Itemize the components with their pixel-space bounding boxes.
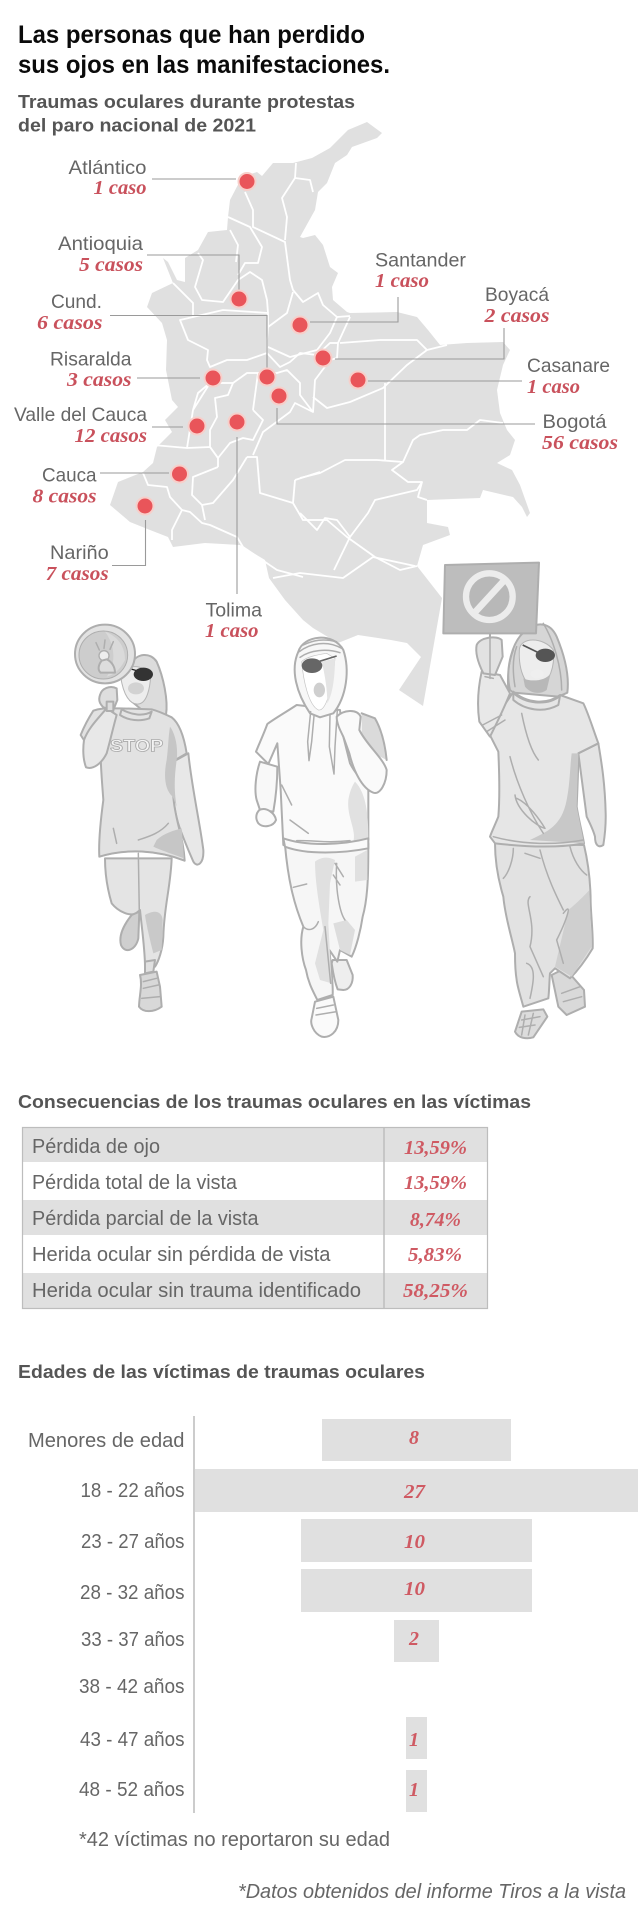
label: Antioquia xyxy=(58,233,143,276)
map of Colombia xyxy=(110,122,530,706)
figure: woman with megaphone: STOP xyxy=(110,736,163,756)
table: consequences: 5,83% xyxy=(408,1244,462,1266)
bar chart: ages: 8 xyxy=(409,1427,419,1449)
label: Cauca: Cauca xyxy=(42,464,97,486)
callout leader lines xyxy=(100,179,535,594)
table: consequences: 8,74% xyxy=(410,1209,461,1231)
table: consequences: 13,59% xyxy=(404,1137,467,1159)
label: Risaralda xyxy=(50,348,132,391)
label: Valle del Cauca xyxy=(14,404,147,447)
bar chart: ages: 1 xyxy=(409,1729,419,1751)
label: Casanare: 1 caso xyxy=(527,376,580,398)
table: consequences: Pérdida parcial de la vista xyxy=(32,1208,259,1230)
bar chart: ages: 27 xyxy=(403,1481,426,1503)
bar chart: ages: 38 - 42 años xyxy=(79,1676,184,1698)
label: Cund.: 6 casos xyxy=(37,312,103,334)
label: Boyacá: Boyacá xyxy=(485,284,549,306)
label: Casanare xyxy=(527,355,610,398)
heading: consequences: Consecuencias de los traumas oculares en las víctimas xyxy=(18,1091,531,1112)
label: Nariño: Nariño xyxy=(50,542,109,564)
note: unreported age: *42 víctimas no reportaron su edad xyxy=(79,1829,390,1851)
title: sus ojos en las manifestaciones. xyxy=(18,51,390,79)
subtitle: del paro nacional de 2021 xyxy=(18,114,256,136)
label: Antioquia: 5 casos xyxy=(79,254,143,276)
label: Tolima: 1 caso xyxy=(205,620,258,642)
label: Boyacá: 2 casos xyxy=(483,305,550,327)
label: Bogotá: 56 casos xyxy=(542,432,618,454)
table: consequences: 13,59% xyxy=(404,1172,467,1194)
bar chart: ages xyxy=(28,1416,638,1813)
label: Tolima: Tolima xyxy=(206,600,262,622)
label: Cauca xyxy=(32,464,97,508)
bar chart: ages: 23 - 27 años xyxy=(81,1531,184,1553)
label: Cund.: Cund. xyxy=(51,291,102,313)
heading: ages: Edades de las víctimas de traumas oculares xyxy=(18,1361,425,1382)
label: Casanare: Casanare xyxy=(527,355,610,377)
table: consequences: 58,25% xyxy=(403,1280,468,1302)
label: Cund. xyxy=(37,291,103,334)
table: consequences: Herida ocular sin pérdida de vista xyxy=(32,1244,331,1266)
subtitle xyxy=(18,91,355,136)
source note: *Datos obtenidos del informe Tiros a la vista xyxy=(238,1881,626,1903)
label: Santander: 1 caso xyxy=(375,270,429,292)
label: Atlántico: 1 caso xyxy=(94,177,146,199)
label: Nariño xyxy=(46,542,109,585)
table: consequences: Pérdida total de la vista xyxy=(32,1172,238,1194)
title: Las personas que han perdido xyxy=(18,21,365,49)
table: consequences: Pérdida de ojo xyxy=(32,1136,160,1158)
figure: man holding prohibition sign xyxy=(443,563,606,1038)
bar chart: ages: 10 xyxy=(404,1531,425,1553)
label: Risaralda: Risaralda xyxy=(50,348,132,370)
bar chart: ages: 43 - 47 años xyxy=(80,1729,184,1751)
label: Nariño: 7 casos xyxy=(46,563,109,585)
table: consequences xyxy=(22,1127,488,1309)
title xyxy=(18,21,390,79)
label: Bogotá: Bogotá xyxy=(542,411,607,433)
bar chart: ages: 33 - 37 años xyxy=(81,1629,184,1651)
figure: hooded man running xyxy=(255,638,387,1037)
bar chart: ages: 28 - 32 años xyxy=(80,1582,184,1604)
bar chart: ages: 10 xyxy=(404,1578,425,1600)
label: Santander: Santander xyxy=(375,250,466,272)
bar chart: ages: 18 - 22 años xyxy=(80,1480,184,1502)
subtitle: Traumas oculares durante protestas xyxy=(18,91,355,112)
bar chart: ages: 48 - 52 años xyxy=(79,1779,184,1801)
label: Valle del Cauca: Valle del Cauca xyxy=(14,404,147,426)
label: Boyacá xyxy=(483,284,550,327)
bar chart: ages: Menores de edad xyxy=(28,1430,184,1452)
figure: woman with megaphone xyxy=(75,625,203,1011)
bar chart: ages: 2 xyxy=(408,1628,419,1650)
label: Valle del Cauca: 12 casos xyxy=(74,425,147,447)
label: Antioquia: Antioquia xyxy=(58,233,143,255)
table: consequences: Herida ocular sin trauma identificado xyxy=(32,1280,361,1302)
label: Bogotá xyxy=(542,411,618,454)
bar chart: ages: 1 xyxy=(409,1779,419,1801)
label: Cauca: 8 casos xyxy=(32,486,97,508)
label: Santander xyxy=(375,250,466,292)
label: Atlántico xyxy=(68,157,147,199)
label: Atlántico: Atlántico xyxy=(68,157,147,179)
label: Tolima xyxy=(205,600,262,642)
label: Risaralda: 3 casos xyxy=(66,369,132,391)
case location dots xyxy=(136,173,366,514)
